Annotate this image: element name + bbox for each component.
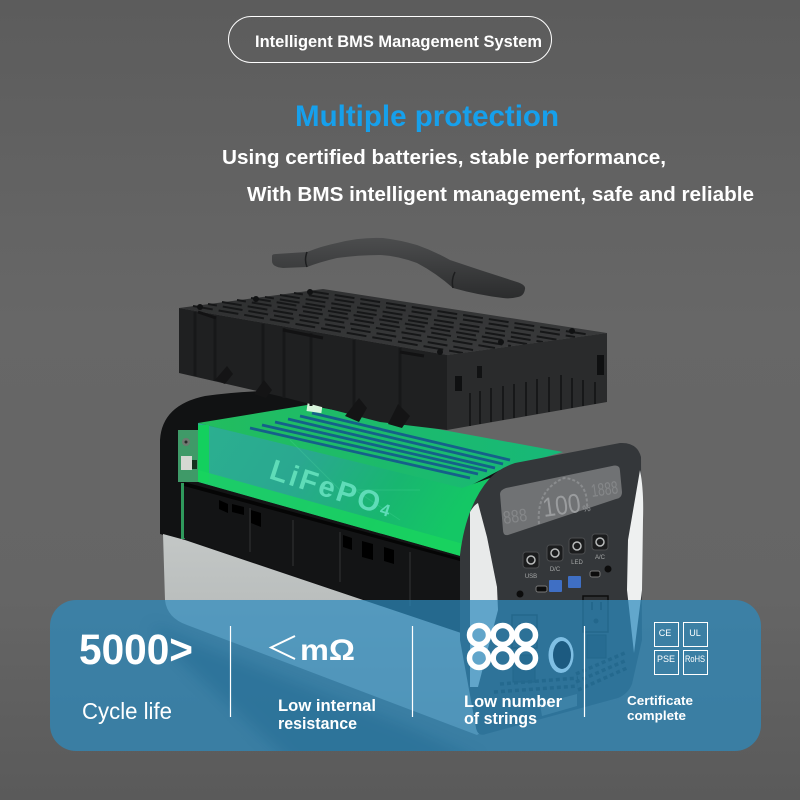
panel shell [460, 443, 642, 735]
button: USB [523, 552, 539, 580]
button: DC: D/C [550, 567, 561, 573]
round power button [548, 637, 574, 673]
stat: cycle life: Cycle life [82, 698, 172, 724]
LCD display [500, 466, 622, 535]
stat: internal resistance: Low internal [278, 697, 376, 715]
button: DC [547, 545, 563, 573]
button: AC: A/C [595, 555, 606, 561]
title pill: Intelligent BMS Management System [255, 33, 542, 51]
stat: certificates [627, 622, 708, 723]
stat: internal resistance: resistance [278, 715, 357, 733]
button: USB: USB [525, 574, 537, 580]
handle [272, 238, 525, 298]
ports [516, 566, 612, 598]
certificate badges [654, 622, 708, 674]
stat: strings: Low number [464, 693, 563, 711]
certificate badges: PSE [657, 654, 675, 664]
LCD display: 1888 [590, 477, 619, 501]
button: AC [592, 534, 608, 561]
button: LED: LED [571, 560, 584, 566]
front control panel [460, 443, 643, 735]
certificate badges: RoHS [685, 654, 705, 664]
battery lid [179, 289, 607, 430]
circuit board [178, 430, 198, 539]
panel background [50, 600, 761, 751]
power station illustration [160, 238, 643, 735]
stat: internal resistance [271, 634, 376, 733]
title pill [228, 16, 552, 62]
stat: cycle life: 5000> [79, 626, 193, 674]
stat: strings [464, 626, 563, 728]
LCD display: 888 [502, 505, 528, 528]
stat: certificates: Certificate [627, 693, 693, 708]
round button centre [553, 641, 571, 669]
LCD display: 100 [541, 488, 582, 523]
silver body [163, 534, 500, 735]
light foot strip [540, 694, 577, 716]
stat: internal resistance: mΩ [300, 634, 355, 667]
certificate badges: UL [689, 628, 701, 638]
white side guards [470, 503, 498, 687]
LiFePO4 battery block [198, 402, 563, 560]
outlets [512, 596, 608, 682]
description text: With BMS intelligent management, safe and reliable [247, 183, 754, 206]
stat: strings: of strings [464, 710, 537, 728]
LCD display: % [582, 503, 591, 514]
description text: Using certified batteries, stable performance, [222, 146, 666, 169]
shadow under body [173, 640, 448, 751]
battery label: LiFePO4 [266, 454, 398, 524]
certificate badges: CE [659, 628, 671, 638]
icon: six rings [470, 626, 536, 668]
button: LED [569, 538, 585, 566]
stat: cycle life [79, 626, 193, 724]
lower battery case [184, 482, 480, 640]
divider [230, 626, 584, 717]
description text [222, 146, 754, 206]
stat: certificates: complete [627, 708, 686, 723]
info panel [50, 600, 761, 751]
speaker grille [494, 652, 627, 692]
body back frame [160, 391, 500, 640]
heading: multiple protection: Multiple protection [295, 100, 559, 133]
